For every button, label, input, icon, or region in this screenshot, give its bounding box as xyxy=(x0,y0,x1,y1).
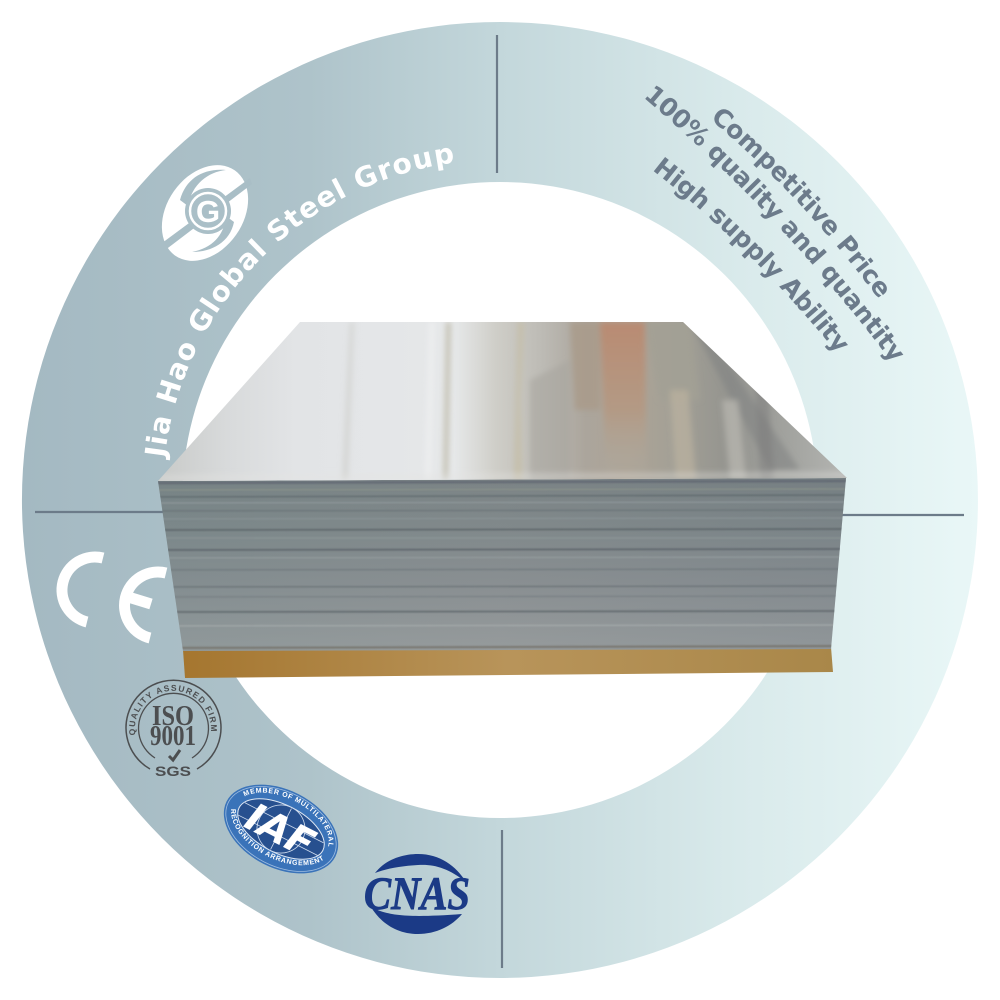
stack top surface xyxy=(158,322,847,481)
line: competitive price: Competitive Price xyxy=(714,109,887,298)
selling points text xyxy=(645,86,904,360)
icon: CE mark xyxy=(62,557,166,638)
icon: IAF badge: IAF xyxy=(238,795,322,868)
icon: ISO 9001 badge: ISO xyxy=(152,700,194,732)
line: quality and quantity: 100% quality and quantity xyxy=(645,86,904,360)
icon: IAF badge: MEMBER OF MULTILATERAL xyxy=(243,788,334,846)
icon: company logo xyxy=(144,149,266,277)
icon: ISO 9001 badge: SGS xyxy=(155,763,191,779)
icon: IAF badge: RECOGNITION ARRANGEMENT xyxy=(231,809,323,866)
icon: IAF badge xyxy=(224,784,338,874)
steel sheet stack photo xyxy=(150,322,850,678)
icon: ISO 9001 badge: QUALITY ASSURED FIRM xyxy=(129,684,217,735)
icon: ISO 9001 badge: 9001 xyxy=(150,720,196,752)
line: supply ability: High supply Ability xyxy=(654,157,848,350)
wooden pallet base xyxy=(183,647,833,678)
icon: ISO 9001 badge xyxy=(125,680,222,779)
icon: CNAS badge: CNAS xyxy=(364,868,470,920)
stack front face xyxy=(150,478,850,651)
icon: CNAS badge xyxy=(364,854,470,934)
brand name on arc: Jia Hao Global Steel Group xyxy=(144,148,453,460)
icon: company logo: G xyxy=(196,194,220,229)
